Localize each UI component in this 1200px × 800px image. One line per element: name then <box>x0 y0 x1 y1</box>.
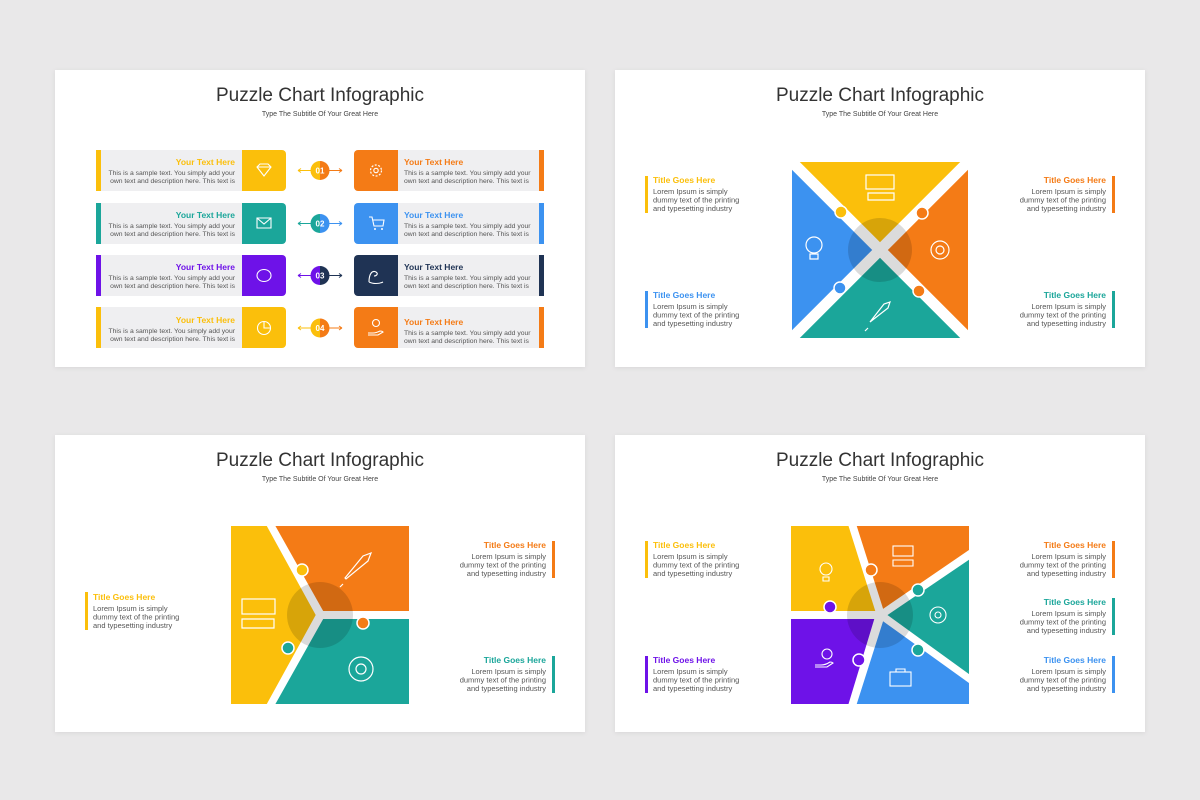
row 4: 04 <box>316 324 325 333</box>
text block right 2: Title Goes Here <box>1044 597 1106 607</box>
text block right 2: dummy text of the printing <box>1020 618 1106 626</box>
text block right 2: and typesetting industry <box>1027 626 1106 635</box>
icons <box>806 175 949 331</box>
title: Puzzle Chart Infographic <box>216 450 424 471</box>
text block right 2: Lorem Ipsum is simply <box>1031 609 1106 618</box>
text block left 2 <box>645 290 739 328</box>
text block left 1: Lorem Ipsum is simply <box>653 187 728 196</box>
text block right 2 <box>1020 290 1115 328</box>
subtitle: Type The Subtitle Of Your Great Here <box>822 476 938 483</box>
icons <box>242 553 373 681</box>
text block right 1: Title Goes Here <box>1044 175 1106 185</box>
puzzle pieces <box>789 524 971 706</box>
row 2: Your Text Here <box>404 210 463 220</box>
row 3: Your Text Here <box>404 262 463 272</box>
puzzle: four triangles <box>790 160 970 340</box>
subtitle: Type The Subtitle Of Your Great Here <box>262 476 378 483</box>
text block left: and typesetting industry <box>93 621 172 630</box>
title: Puzzle Chart Infographic <box>776 450 984 471</box>
row 4: Your Text Here <box>176 315 235 325</box>
row 3: Your Text Here <box>176 262 235 272</box>
text block left 1: Lorem Ipsum is simply <box>653 552 728 561</box>
row 4: own text and description here. This text is <box>110 336 236 343</box>
text block right 1: and typesetting industry <box>1027 204 1106 213</box>
text block left 2: dummy text of the printing <box>653 310 739 320</box>
text block left: Title Goes Here <box>93 592 155 602</box>
text block left 1: Title Goes Here <box>653 540 715 550</box>
row 3: own text and description here. This text is <box>110 283 236 290</box>
row 1: This is a sample text. You simply add your <box>404 170 531 177</box>
text block left 2: Lorem Ipsum is simply <box>653 302 728 311</box>
row 1: own text and description here. This text is <box>404 178 530 185</box>
row 2: Your Text Here <box>176 210 235 220</box>
text block right 2: Lorem Ipsum is simply <box>471 667 546 676</box>
text block right 2: Lorem Ipsum is simply <box>1031 302 1106 311</box>
text block right 1 <box>1020 175 1115 213</box>
text block right 2: Title Goes Here <box>484 655 546 665</box>
panel: slide 2 four-piece puzzle <box>615 70 1145 367</box>
text block left 2 <box>645 655 739 693</box>
row 2 <box>96 203 544 244</box>
text block left 2: Title Goes Here <box>653 290 715 300</box>
text block right 1: dummy text of the printing <box>1020 560 1106 570</box>
text block left <box>85 592 179 630</box>
text block left: Lorem Ipsum is simply <box>93 604 168 613</box>
text block right 2: Title Goes Here <box>1044 290 1106 300</box>
text block right 2: and typesetting industry <box>467 684 546 693</box>
text block right 3 <box>1020 655 1115 693</box>
row 1: This is a sample text. You simply add your <box>108 170 236 177</box>
text block left 2: dummy text of the printing <box>653 676 739 684</box>
text block right 1: and typesetting industry <box>467 569 546 578</box>
text block right 2: and typesetting industry <box>1027 319 1106 328</box>
text block left 2: Title Goes Here <box>653 655 715 665</box>
text block left 1: dummy text of the printing <box>653 560 739 570</box>
row 2: own text and description here. This text is <box>404 231 530 238</box>
row 4: This is a sample text. You simply add your <box>108 328 236 335</box>
text block left 1 <box>645 540 739 578</box>
text block right 1: Lorem Ipsum is simply <box>471 552 546 561</box>
title: Puzzle Chart Infographic <box>776 85 984 106</box>
text block left: dummy text of the printing <box>93 612 179 622</box>
text block left 2: and typesetting industry <box>653 319 732 328</box>
row 4: This is a sample text. You simply add your <box>404 330 531 337</box>
text block right 1 <box>1020 540 1115 578</box>
text block left 1: and typesetting industry <box>653 569 732 578</box>
subtitle: Type The Subtitle Of Your Great Here <box>822 111 938 118</box>
text block left 1 <box>645 175 739 213</box>
text block right 1: and typesetting industry <box>1027 569 1106 578</box>
text block right 2 <box>460 655 555 693</box>
text block left 2: and typesetting industry <box>653 684 732 693</box>
row 2: 02 <box>316 220 325 228</box>
row 1: Your Text Here <box>404 157 463 167</box>
text block right 3: Title Goes Here <box>1044 655 1106 665</box>
text block right 1: Lorem Ipsum is simply <box>1031 187 1106 196</box>
row 1: 01 <box>316 166 325 176</box>
text block right 2 <box>1020 597 1115 635</box>
row 3: This is a sample text. You simply add your <box>108 275 236 282</box>
puzzle pieces <box>229 524 411 706</box>
row 3: 03 <box>316 272 325 280</box>
row 3: own text and description here. This text is <box>404 283 530 290</box>
text block left 2: Lorem Ipsum is simply <box>653 667 728 676</box>
row 1: Your Text Here <box>176 157 235 167</box>
panel: slide 1 list <box>55 70 585 367</box>
text block right 1: dummy text of the printing <box>1020 196 1106 204</box>
text block left 1: and typesetting industry <box>653 204 732 213</box>
text block left 1: dummy text of the printing <box>653 196 739 204</box>
icons <box>815 546 946 686</box>
text block left 1: Title Goes Here <box>653 175 715 185</box>
text block right 2: dummy text of the printing <box>460 676 546 684</box>
text block right 1: Lorem Ipsum is simply <box>1031 552 1106 561</box>
row 3: This is a sample text. You simply add your <box>404 275 531 282</box>
text block right 1 <box>460 540 555 578</box>
panel: slide 3 three-piece puzzle <box>55 435 585 732</box>
row 1 <box>96 150 544 191</box>
text block right 1: Title Goes Here <box>484 540 546 550</box>
subtitle: Type The Subtitle Of Your Great Here <box>262 111 378 118</box>
row 2: This is a sample text. You simply add your <box>108 223 236 230</box>
row 2: own text and description here. This text is <box>110 231 236 238</box>
row 4: Your Text Here <box>404 317 463 327</box>
text block right 3: Lorem Ipsum is simply <box>1031 667 1106 676</box>
row 3 <box>96 255 544 296</box>
panel: slide 4 five-piece puzzle <box>615 435 1145 732</box>
text block right 1: Title Goes Here <box>1044 540 1106 550</box>
text block right 1: dummy text of the printing <box>460 560 546 570</box>
text block right 3: and typesetting industry <box>1027 684 1106 693</box>
row 2: This is a sample text. You simply add your <box>404 223 531 230</box>
row 1: own text and description here. This text is <box>110 178 236 185</box>
row 4: own text and description here. This text is <box>404 338 530 345</box>
text block right 2: dummy text of the printing <box>1020 310 1106 320</box>
title: Puzzle Chart Infographic <box>216 85 424 106</box>
text block right 3: dummy text of the printing <box>1020 676 1106 684</box>
row 4 <box>96 307 544 348</box>
